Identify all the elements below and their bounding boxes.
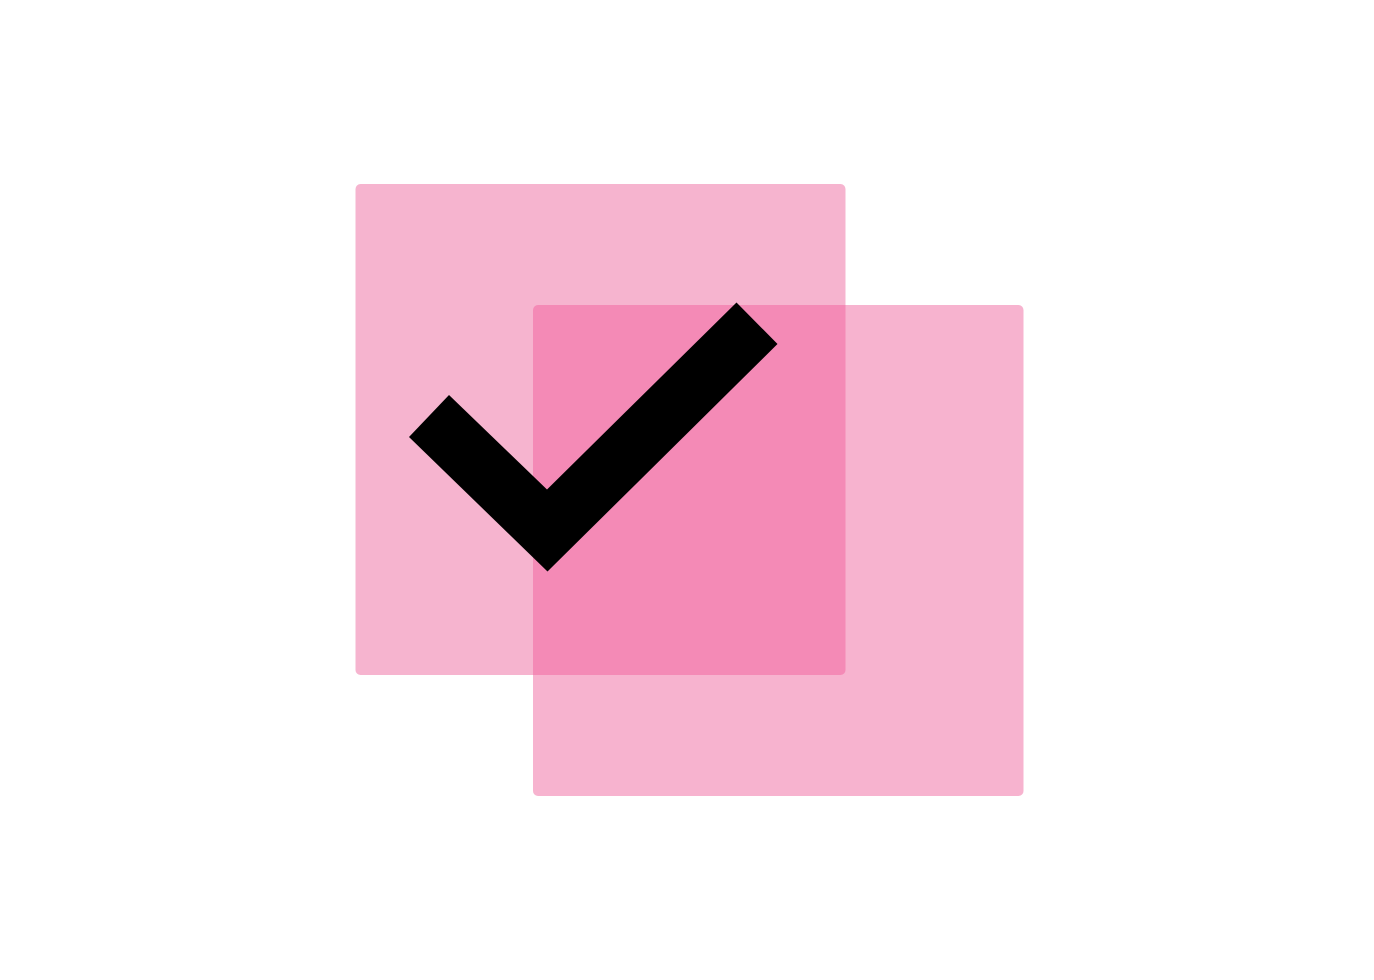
back square: upper left: [356, 184, 846, 675]
front square: lower right: [533, 305, 1024, 796]
overlap region: [533, 305, 846, 675]
icon: black check mark: [409, 302, 778, 572]
